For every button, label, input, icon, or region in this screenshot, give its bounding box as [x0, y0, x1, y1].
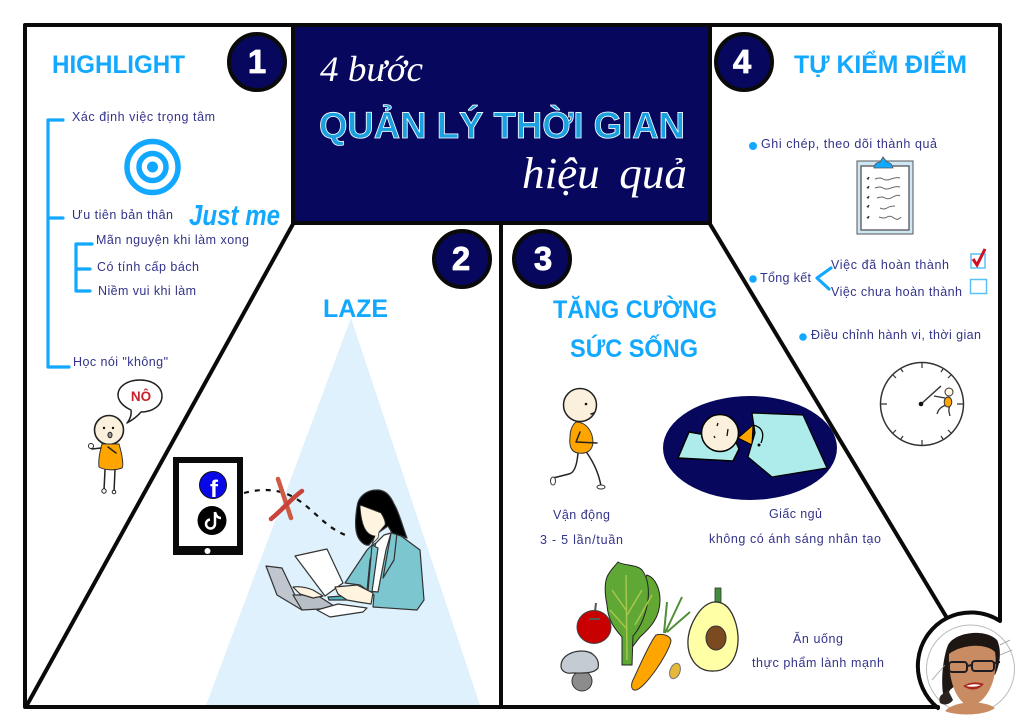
- text: Tổng kết: Tổng kết: [760, 271, 812, 285]
- badge 4: [716, 34, 772, 90]
- text: Điều chỉnh hành vi, thời gian: Điều chỉnh hành vi, thời gian: [811, 328, 981, 342]
- badge 3: 3: [534, 240, 552, 277]
- text: Việc chưa hoàn thành: Việc chưa hoàn thành: [831, 285, 962, 299]
- heading: Sức sống: SỨC SỐNG: [570, 333, 698, 363]
- illustration: woman working at laptop: [266, 490, 424, 617]
- text: Ưu tiên bản thân: Ưu tiên bản thân: [72, 208, 173, 222]
- icon: healthy food: [561, 562, 738, 691]
- text: Giấc ngủ: Giấc ngủ: [769, 507, 822, 521]
- text: Niềm vui khi làm: Niềm vui khi làm: [98, 284, 196, 298]
- panel: Laze light cone: [205, 318, 481, 708]
- badge 2: [434, 231, 490, 287]
- icon: empty box: [970, 280, 986, 294]
- title: hiệu quả: hiệu quả: [522, 149, 687, 198]
- heading: Laze: LAZE: [323, 295, 388, 323]
- bullet: [749, 275, 757, 283]
- icon: clipboard: [857, 157, 913, 234]
- panel: Tự kiểm điểm: [749, 50, 986, 446]
- text: Ghi chép: Ghi chép, theo dõi thành quả: [761, 137, 937, 151]
- panel: title banner: [292, 26, 710, 224]
- portrait: author avatar: [926, 625, 1014, 714]
- badge 1: 1: [248, 43, 266, 80]
- text: Có tính cấp bách: Có tính cấp bách: [97, 260, 199, 274]
- text: Vận động: Vận động: [553, 508, 610, 522]
- main bracket: [48, 120, 69, 367]
- badge 4: 4: [733, 43, 752, 80]
- text: Việc đã hoàn thành: Việc đã hoàn thành: [831, 258, 949, 272]
- dashed connector: [244, 490, 348, 536]
- text: Học nói không: Học nói "không": [73, 355, 168, 369]
- heading: Tăng cường: TĂNG CƯỜNG: [553, 294, 717, 324]
- icon: tablet with social apps: [173, 460, 243, 555]
- icon: red cross: [271, 479, 302, 519]
- panel: Tăng cường sức sống: [540, 294, 884, 691]
- text: 3 - 5 lần/tuần: 3 - 5 lần/tuần: [540, 533, 623, 547]
- icon: target: [127, 142, 178, 192]
- text: thực phẩm lành mạnh: thực phẩm lành mạnh: [752, 656, 884, 670]
- title: 4 bước: 4 bước: [320, 49, 423, 89]
- icon: clock with climbing figure: [880, 362, 964, 446]
- bracket: [817, 268, 831, 289]
- icon: sleeping person: [663, 396, 837, 500]
- bullet: [749, 142, 757, 150]
- sub bracket: [76, 244, 92, 291]
- heading: Tự kiểm điểm: TỰ KIỂM ĐIỂM: [794, 50, 967, 79]
- text: không có ánh sáng nhân tạo: không có ánh sáng nhân tạo: [709, 532, 881, 546]
- icon: person saying no: [88, 380, 162, 494]
- panel: Highlight: [48, 51, 280, 494]
- badge 3: [514, 231, 570, 287]
- text: Ăn uống: Ăn uống: [793, 631, 843, 646]
- icon: checked box: [971, 249, 985, 268]
- icon: tablet with social apps: f: [210, 476, 219, 503]
- heading: Highlight: HIGHLIGHT: [52, 51, 185, 79]
- icon: person saying no: NÔ: [131, 389, 151, 404]
- bullet: [799, 333, 807, 341]
- text: Xác định việc trọng tâm: Xác định việc trọng tâm: [72, 110, 215, 124]
- panel: Laze: [173, 295, 424, 617]
- title: Quản lý thời gian: QUẢN LÝ THỜI GIAN: [319, 104, 685, 146]
- icon: runner: [550, 388, 605, 489]
- badge 2: 2: [452, 240, 470, 277]
- handwriting: Just me: Just me: [189, 200, 280, 232]
- text: Mãn nguyện khi làm xong: Mãn nguyện khi làm xong: [96, 233, 249, 247]
- badge 1: [229, 34, 285, 90]
